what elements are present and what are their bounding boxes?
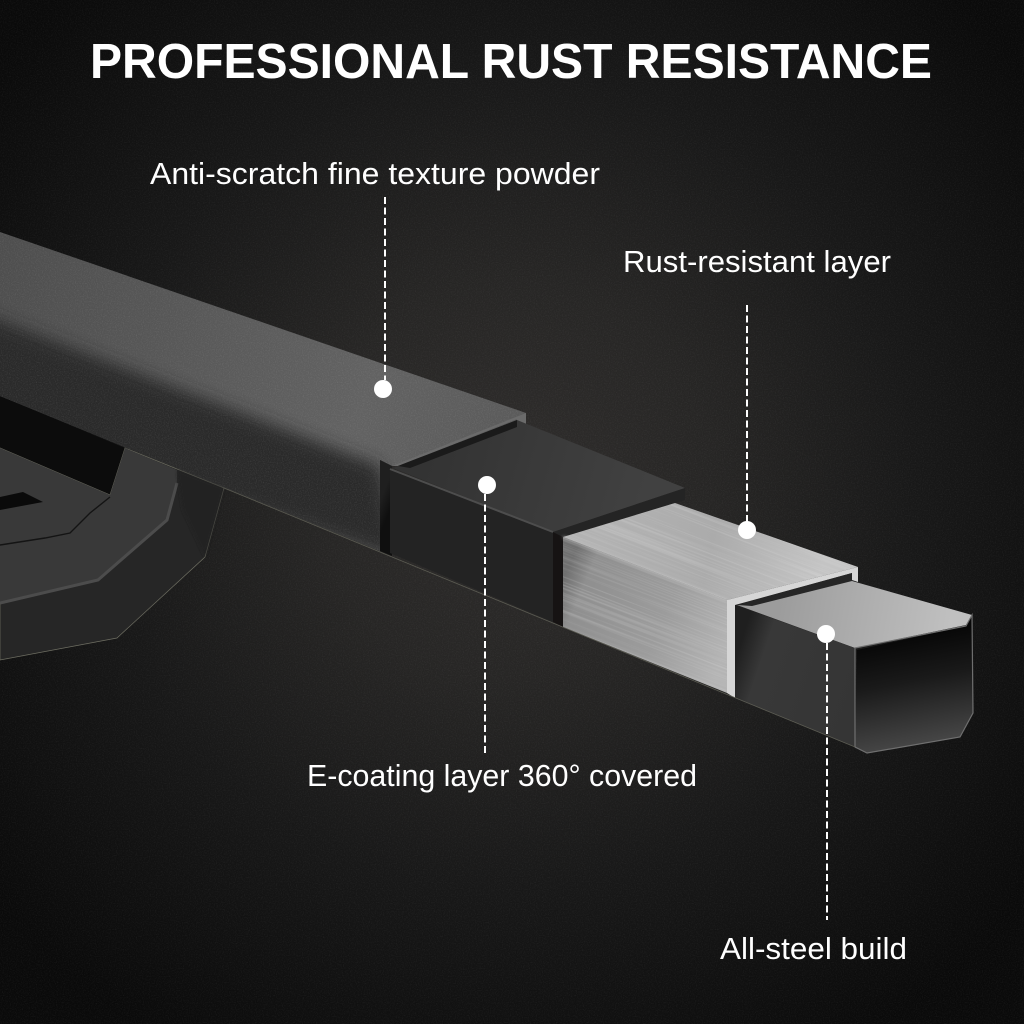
callout: all-steel build: All-steel build xyxy=(720,931,907,966)
callout: e-coating layer: E-coating layer 360° covered xyxy=(307,758,697,793)
bar: e-coating layer xyxy=(390,420,685,627)
powder coat end lip xyxy=(392,413,526,466)
callout: anti-scratch powder xyxy=(150,156,600,398)
callout: all-steel build xyxy=(720,625,907,966)
bracket: step plate at lower left xyxy=(0,396,224,660)
callout: e-coating layer xyxy=(307,476,697,793)
callout: rust-resistant layer: Rust-resistant layer xyxy=(623,244,891,279)
bar lower edge hairline xyxy=(224,488,855,747)
gap shadow between layers xyxy=(380,460,392,556)
title: PROFESSIONAL RUST RESISTANCE xyxy=(90,35,932,89)
callout: anti-scratch powder: Anti-scratch fine texture powder xyxy=(150,156,600,191)
steel rim xyxy=(727,567,858,698)
callout: rust-resistant layer xyxy=(623,244,891,539)
bar: outer powder-coated tube xyxy=(0,232,530,562)
bar: inner all-steel tube with open end xyxy=(735,573,973,753)
bar: brushed steel rust-resistant layer xyxy=(561,503,858,698)
